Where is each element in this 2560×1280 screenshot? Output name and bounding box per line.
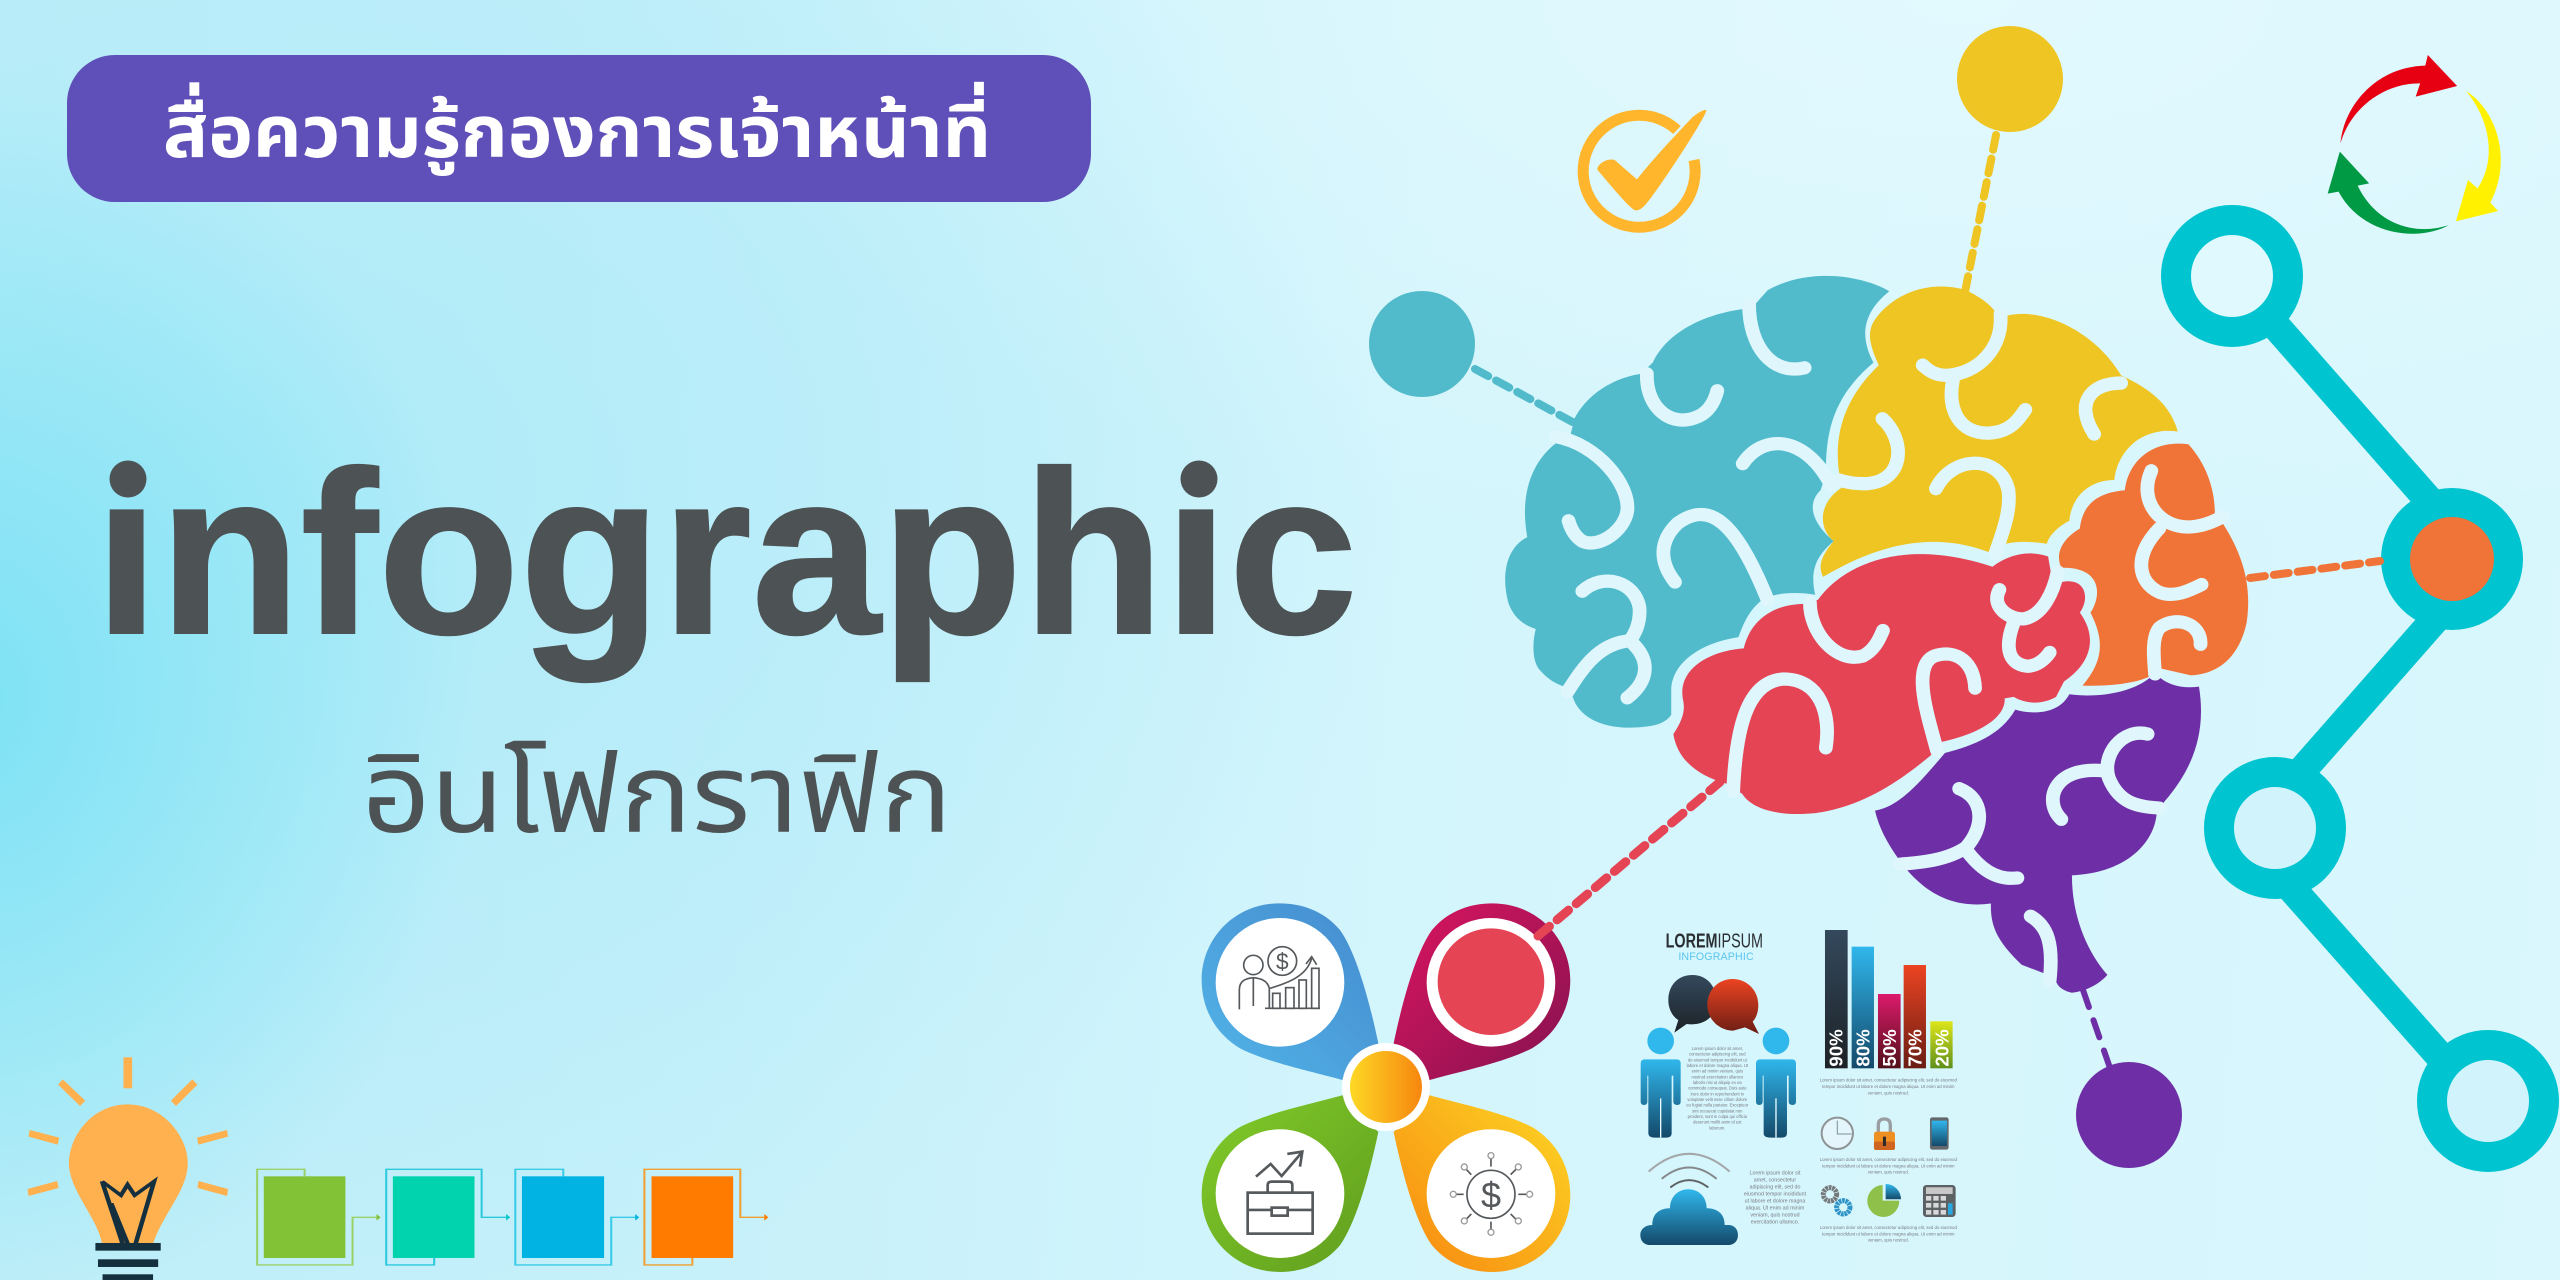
caption 3: veniam, quis nostrud. xyxy=(1868,1238,1909,1243)
thumbnail heading: INFOGRAPHIC xyxy=(1678,951,1754,963)
dashed connector: red xyxy=(1538,782,1720,936)
cloud caption: exercitation ullamco. xyxy=(1751,1220,1799,1226)
base xyxy=(95,1243,161,1280)
bar chart: 80% xyxy=(1852,1029,1873,1067)
chart caption: Lorem ipsum dolor sit amet, consectetur adipiscing elit, sed do eiusmod xyxy=(1820,1078,1957,1083)
node 2 xyxy=(2381,488,2523,630)
chart caption xyxy=(1820,1078,1957,1095)
chart caption: tempor incididunt ut labore et dolore magna aliqua. Ut enim ad minim xyxy=(1822,1084,1955,1089)
thumbnail heading: LOREMIPSUM xyxy=(1666,929,1763,952)
icon: briefcase xyxy=(1248,1152,1313,1234)
small text column: eu fugiat nulla pariatur. Excepteur xyxy=(1686,1103,1749,1108)
icon: pie chart xyxy=(1867,1184,1901,1217)
small text column: proident, sunt in culpa qui officia xyxy=(1688,1114,1748,1119)
network chain xyxy=(2176,220,2544,1157)
lobe: orange xyxy=(2059,444,2248,686)
cloud caption: eiusmod tempor incididunt xyxy=(1744,1192,1807,1198)
lobe: purple xyxy=(1875,673,2201,993)
sulci lines xyxy=(1556,304,2223,980)
thumbnail heading xyxy=(1666,929,1763,963)
small text column: irure dolor in reprehenderit in xyxy=(1691,1091,1745,1096)
small text column: laborum. xyxy=(1709,1125,1725,1130)
people xyxy=(1641,1028,1796,1138)
lobe: yellow xyxy=(1821,287,2178,577)
small text column: deserunt mollit anim id est xyxy=(1693,1120,1742,1125)
small text column: commodo consequat. Duis aute xyxy=(1688,1086,1747,1091)
node 3 xyxy=(2219,772,2331,884)
brain xyxy=(1505,276,2248,993)
icon: dollar network: $ xyxy=(1481,1174,1501,1215)
flower diagram xyxy=(1202,903,1570,1272)
petal: orange xyxy=(1394,1095,1570,1272)
cloud caption: amet, consectetur xyxy=(1754,1178,1796,1184)
lobe: teal xyxy=(1505,276,1889,728)
caption 2: veniam, quis nostrud. xyxy=(1868,1170,1909,1175)
ball: yellow xyxy=(1957,26,2063,132)
small text column: laboris nisi ut aliquip ex ea xyxy=(1693,1080,1742,1085)
icon: padlock xyxy=(1874,1119,1895,1150)
node 4 xyxy=(2432,1045,2544,1157)
cloud caption: Lorem ipsum dolor sit xyxy=(1750,1170,1801,1176)
cloud caption: ut labore et dolore magna xyxy=(1745,1199,1805,1205)
ball: purple xyxy=(2076,1062,2182,1168)
title badge xyxy=(67,55,1091,202)
glass xyxy=(69,1104,188,1243)
speech bubbles xyxy=(1668,975,1759,1034)
box: green xyxy=(257,1169,381,1265)
bar chart xyxy=(1825,930,1953,1068)
icon: clock xyxy=(1822,1118,1853,1149)
icon: light bulb xyxy=(28,1057,228,1280)
caption 3: Lorem ipsum dolor sit amet, consectetur adipiscing elit, sed do eiusmod xyxy=(1820,1225,1957,1230)
cloud caption xyxy=(1744,1170,1807,1226)
cloud xyxy=(1640,1189,1738,1245)
petal: green xyxy=(1202,1095,1378,1272)
process boxes xyxy=(257,1169,768,1265)
caption 3 xyxy=(1820,1225,1957,1243)
small text column: nostrud exercitation ullamco xyxy=(1691,1074,1744,1079)
small text column: enim ad minim veniam, quis xyxy=(1692,1069,1743,1074)
caption 3: tempor incididunt ut labore et dolore magna aliqua. Ut enim ad minim xyxy=(1822,1231,1955,1236)
small text column: voluptate velit esse cillum dolore xyxy=(1687,1097,1748,1102)
small text column xyxy=(1686,1046,1749,1130)
white discs xyxy=(1216,918,1555,1258)
title badge: สื่อความรู้กองการเจ้าหน้าที่ xyxy=(163,82,991,176)
box: orange xyxy=(644,1169,768,1265)
small text column: sint occaecat cupidatat non xyxy=(1692,1108,1743,1113)
petal: blue xyxy=(1202,903,1378,1080)
bar chart: 50% xyxy=(1879,1029,1900,1067)
caption 2: Lorem ipsum dolor sit amet, consectetur adipiscing elit, sed do eiusmod xyxy=(1820,1157,1957,1162)
small text column: consectetur adipiscing elit, sed xyxy=(1689,1052,1746,1057)
icon: calculator xyxy=(1923,1185,1956,1217)
cloud caption: veniam, quis nostrud xyxy=(1750,1213,1800,1219)
bar chart: 70% xyxy=(1905,1029,1926,1067)
dashed connectors xyxy=(1475,135,2380,1068)
wifi arcs xyxy=(1649,1154,1729,1187)
icon: person and chart xyxy=(1239,947,1320,1009)
lobe: red xyxy=(1673,553,2090,814)
small text column: labore et dolore magna aliqua. Ut xyxy=(1687,1063,1749,1068)
infographic thumbnail xyxy=(1640,929,1957,1245)
cloud caption: adipiscing elit, sed do xyxy=(1750,1185,1800,1191)
bar chart: 90% xyxy=(1826,1029,1847,1067)
box: teal xyxy=(386,1169,510,1265)
icon: person and chart: $ xyxy=(1276,948,1289,974)
small text column: Lorem ipsum dolor sit amet, xyxy=(1692,1046,1743,1051)
filament xyxy=(102,1181,154,1243)
icon: dollar network xyxy=(1450,1153,1533,1235)
petal: crimson xyxy=(1394,903,1570,1080)
node 1 xyxy=(2176,220,2288,332)
bar chart: 20% xyxy=(1931,1029,1952,1067)
icon: phone xyxy=(1930,1117,1949,1150)
hub xyxy=(1342,1043,1430,1131)
heading: infographic: infographic xyxy=(94,424,1358,683)
icon: check mark xyxy=(1583,110,1706,227)
chart caption: veniam, quis nostrud. xyxy=(1868,1090,1909,1095)
ball: teal xyxy=(1369,291,1475,397)
caption 2: tempor incididunt ut labore et dolore magna aliqua. Ut enim ad minim xyxy=(1822,1163,1955,1168)
box: blue xyxy=(515,1169,639,1265)
caption 2 xyxy=(1820,1157,1957,1175)
small text column: do eiusmod tempor incididunt ut xyxy=(1688,1057,1748,1062)
subheading: Thai: อินโฟกราฟิก xyxy=(362,733,952,856)
red disc xyxy=(1438,928,1544,1035)
rays xyxy=(28,1057,228,1196)
icon: cycle arrows xyxy=(2328,55,2501,234)
cloud caption: aliqua. Ut enim ad minim xyxy=(1746,1206,1805,1212)
icon: gears xyxy=(1823,1188,1850,1214)
